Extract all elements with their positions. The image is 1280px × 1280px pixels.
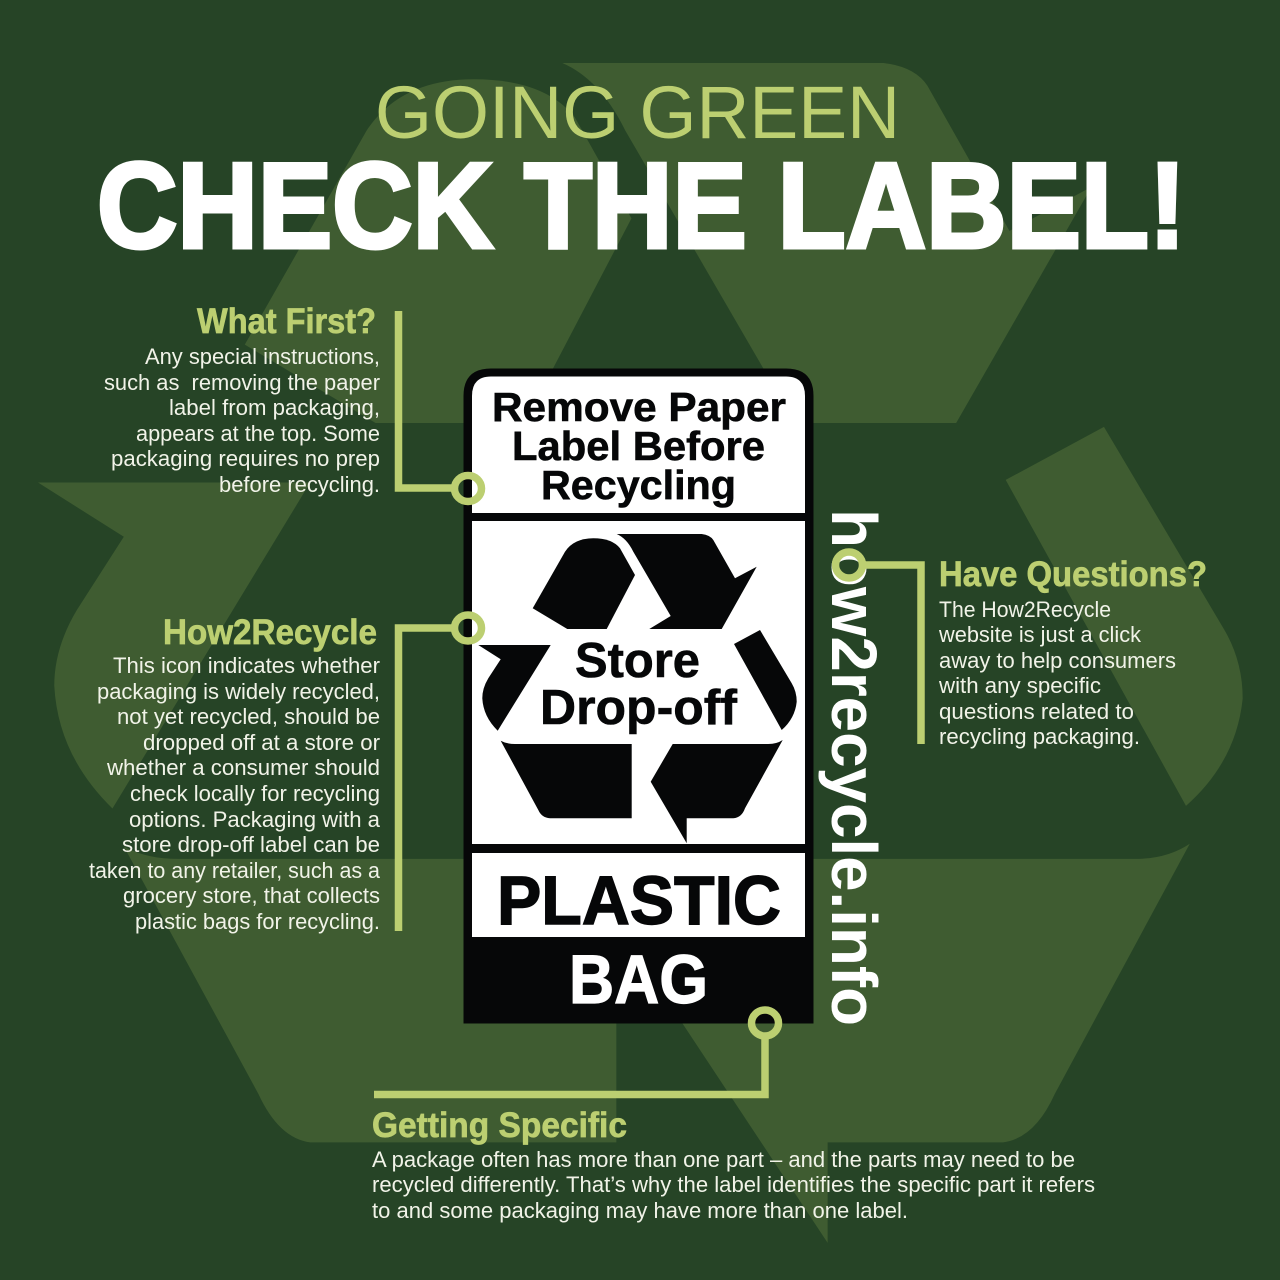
recycling icon panel: Drop-off bbox=[540, 681, 738, 735]
text block: what first: packaging requires no prep bbox=[111, 446, 380, 471]
text block: what first: appears at the top. Some bbox=[136, 421, 380, 446]
text block: how2recycle: not yet recycled, should be bbox=[117, 704, 380, 729]
instruction panel: Label Before bbox=[512, 423, 765, 469]
connector: have questions bbox=[836, 552, 921, 744]
text block: have questions bbox=[938, 597, 1176, 749]
instruction panel bbox=[472, 376, 805, 513]
heading: what first: What First? bbox=[197, 301, 376, 341]
connector: getting specific bbox=[374, 1010, 778, 1094]
text block: how2recycle: dropped off at a store or bbox=[143, 730, 380, 755]
text block: getting specific: A package often has more than one part – and the parts may need to be bbox=[372, 1147, 1075, 1172]
text block: how2recycle: check locally for recycling bbox=[130, 781, 380, 806]
heading: have questions: Have Questions? bbox=[939, 554, 1207, 594]
text block: have questions: The How2Recycle bbox=[939, 597, 1111, 622]
heading: how2recycle: How2Recycle bbox=[163, 612, 377, 652]
connector: how2recycle bbox=[398, 615, 482, 931]
heading: getting specific: Getting Specific bbox=[372, 1105, 627, 1145]
text block: what first bbox=[104, 344, 380, 497]
recycling icon panel: Store bbox=[575, 634, 700, 688]
text block: have questions: recycling packaging. bbox=[939, 724, 1140, 749]
text block: getting specific: to and some packaging may have more than one label. bbox=[372, 1198, 908, 1223]
panel: how2recycle label bbox=[464, 368, 814, 1024]
text block: how2recycle: whether a consumer should bbox=[106, 755, 380, 780]
connector: what first bbox=[398, 311, 482, 502]
instruction panel: Remove Paper bbox=[492, 384, 786, 430]
part name: bag: BAG bbox=[569, 941, 708, 1018]
title: check the label: CHECK THE LABEL! bbox=[97, 138, 1186, 274]
text block: how2recycle: grocery store, that collects bbox=[123, 883, 380, 908]
text block: getting specific bbox=[372, 1147, 1095, 1223]
text block: what first: Any special instructions, bbox=[145, 344, 380, 369]
text block: have questions: away to help consumers bbox=[939, 648, 1176, 673]
text block: how2recycle: options. Packaging with a bbox=[129, 807, 381, 832]
text block: how2recycle: This icon indicates whether bbox=[113, 653, 380, 678]
text block: have questions: questions related to bbox=[939, 699, 1134, 724]
text block: how2recycle: plastic bags for recycling. bbox=[135, 909, 380, 934]
material panel: plastic: PLASTIC bbox=[497, 862, 781, 939]
text block: have questions: with any specific bbox=[938, 673, 1101, 698]
text block: what first: label from packaging, bbox=[169, 395, 380, 420]
title: going green: GOING GREEN bbox=[375, 71, 900, 154]
text block: how2recycle bbox=[89, 653, 381, 934]
text block: how2recycle: taken to any retailer, such as a bbox=[89, 858, 381, 883]
label outer frame bbox=[464, 368, 814, 1024]
text block: how2recycle: packaging is widely recycled, bbox=[97, 679, 380, 704]
text block: what first: before recycling. bbox=[219, 472, 380, 497]
text block: how2recycle: store drop-off label can be bbox=[122, 832, 380, 857]
recycling icon panel bbox=[472, 521, 805, 844]
text block: getting specific: recycled differently. That’s why the label identifies the specific part it refers bbox=[372, 1172, 1095, 1197]
text block: have questions: website is just a click bbox=[938, 622, 1142, 647]
website text: how2recycle.info bbox=[818, 509, 890, 1026]
text block: what first: such as removing the paper bbox=[104, 370, 380, 395]
instruction panel: Recycling bbox=[541, 462, 736, 508]
